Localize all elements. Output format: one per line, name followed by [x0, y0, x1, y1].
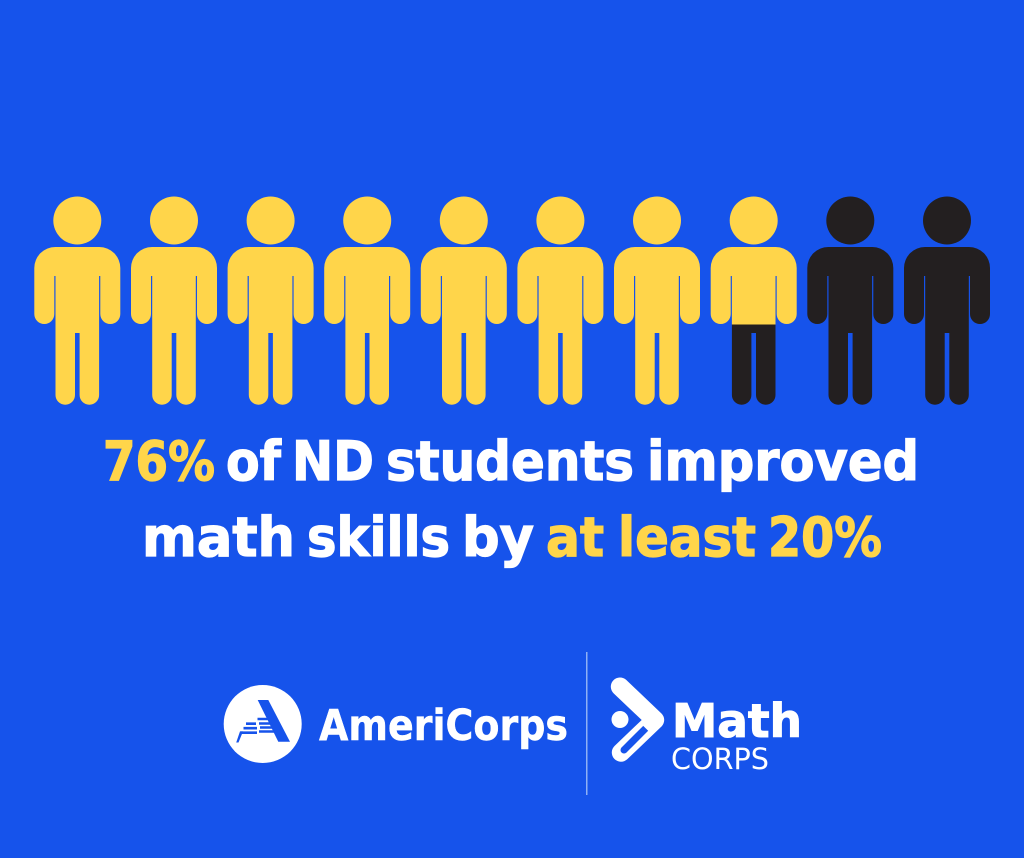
person 10 black	[904, 196, 990, 405]
person 3 yellow	[228, 196, 314, 405]
headline text: 20%	[768, 506, 882, 569]
person 7 yellow	[614, 196, 700, 405]
headline text: students	[386, 430, 634, 493]
headline text: ND	[292, 430, 374, 493]
headline text	[103, 430, 919, 569]
divider between logos	[586, 652, 588, 795]
AmeriCorps logo	[224, 685, 568, 763]
wordmark: CORPS: CORPS	[671, 742, 769, 776]
wordmark: AmeriCorps: AmeriCorps	[319, 702, 568, 751]
person 8 partly yellow, black legs	[711, 196, 797, 405]
icon: AmeriCorps circle with stylised A	[224, 685, 302, 763]
person 9 black	[807, 196, 893, 405]
pictogram: ten people, 7.6 highlighted	[34, 196, 990, 405]
wordmark: Math: Math	[672, 694, 802, 748]
person 4 yellow	[324, 196, 410, 405]
headline text: math	[142, 506, 295, 569]
headline text: least	[618, 506, 756, 569]
headline text: improved	[647, 430, 919, 493]
person 1 yellow	[34, 196, 120, 405]
person 6 yellow	[517, 196, 603, 405]
headline text: of	[226, 430, 281, 493]
person 2 yellow	[131, 196, 217, 405]
person 5 yellow	[421, 196, 507, 405]
headline text: at	[546, 506, 604, 569]
headline text: 76%	[103, 430, 215, 493]
Math Corps logo	[612, 687, 802, 776]
headline text: skills	[307, 506, 450, 569]
icon: Math Corps chevron and dot	[612, 687, 655, 754]
headline text: by	[462, 506, 534, 569]
